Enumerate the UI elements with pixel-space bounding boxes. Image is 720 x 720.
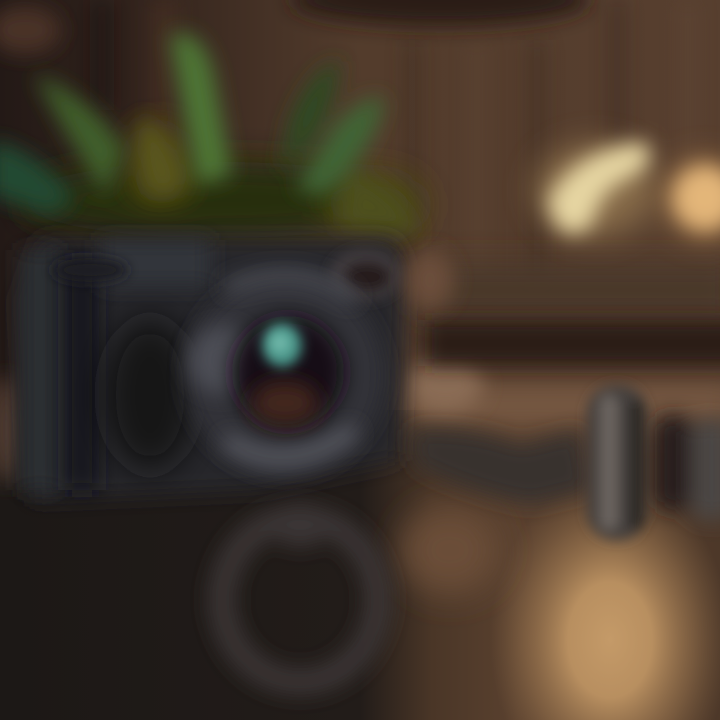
dark table band (425, 320, 720, 366)
background wall (0, 0, 720, 420)
teal lens reflection (262, 323, 302, 367)
lens reflection on table (222, 503, 378, 682)
blurred metal objects on table (410, 385, 720, 540)
wall lights (535, 142, 720, 238)
camera body (18, 238, 454, 500)
floor / table surface (0, 357, 720, 720)
camera lens (185, 275, 385, 475)
viewfinder knob (329, 249, 401, 301)
plant leaves (0, 33, 423, 238)
